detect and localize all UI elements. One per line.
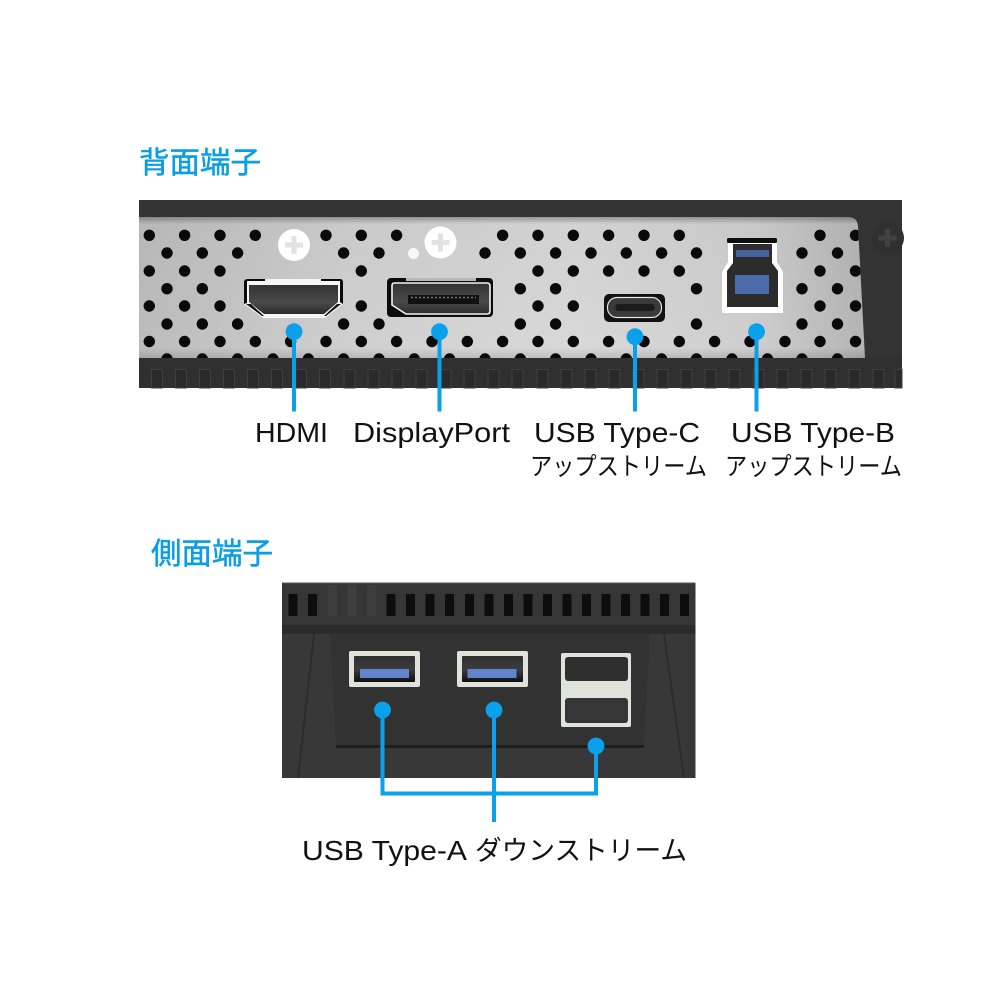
port: USB Type-C	[604, 294, 665, 322]
port: USB Type-A 1	[349, 651, 420, 687]
title: rear ports: 背面端子	[139, 147, 261, 180]
label: USB Type-B upstream: アップストリーム	[725, 453, 902, 481]
callout: USB Type-A bracket	[374, 702, 604, 822]
label: USB Type-A downstream	[302, 835, 687, 866]
callout: DisplayPort connector	[431, 323, 448, 412]
label: USB Type-A downstream: USB Type-A	[302, 835, 467, 866]
side shoulder lines	[298, 634, 684, 778]
port: USB Type-B	[722, 238, 783, 313]
callout: USB Type-C connector	[627, 328, 643, 412]
bottom bar slots	[152, 370, 902, 388]
panel: side ports photo	[282, 583, 696, 778]
port: USB Type-A stacked	[561, 653, 631, 727]
label: USB Type-B upstream	[725, 417, 902, 481]
port: USB Type-A 2	[457, 651, 528, 687]
label: USB Type-C upstream	[530, 417, 707, 481]
label: USB Type-C upstream: USB Type-C	[534, 417, 700, 448]
label: USB Type-B upstream: USB Type-B	[731, 417, 895, 448]
callout: HDMI connector	[286, 323, 302, 412]
recessed port area	[330, 634, 650, 747]
perforation holes	[144, 230, 861, 365]
bottom ribbed bar	[139, 358, 902, 388]
port: HDMI	[244, 279, 343, 318]
label: USB Type-C upstream: アップストリーム	[530, 453, 707, 481]
bezel screw cross	[878, 229, 896, 247]
icon: screw left	[278, 229, 310, 261]
port: DisplayPort	[387, 278, 493, 317]
label: USB Type-A downstream: ダウンストリーム	[475, 836, 687, 866]
metal plate	[139, 217, 865, 358]
icon: screw right	[408, 226, 456, 259]
label: HDMI: HDMI	[255, 417, 328, 448]
callout: USB Type-B connector	[748, 323, 765, 412]
title: side ports: 側面端子	[151, 538, 273, 571]
vent slot seams	[282, 582, 696, 584]
label: DisplayPort: DisplayPort	[353, 417, 510, 448]
icon: bezel screw	[872, 222, 904, 254]
vent slots	[288, 585, 689, 616]
panel: rear ports photo	[139, 200, 904, 388]
